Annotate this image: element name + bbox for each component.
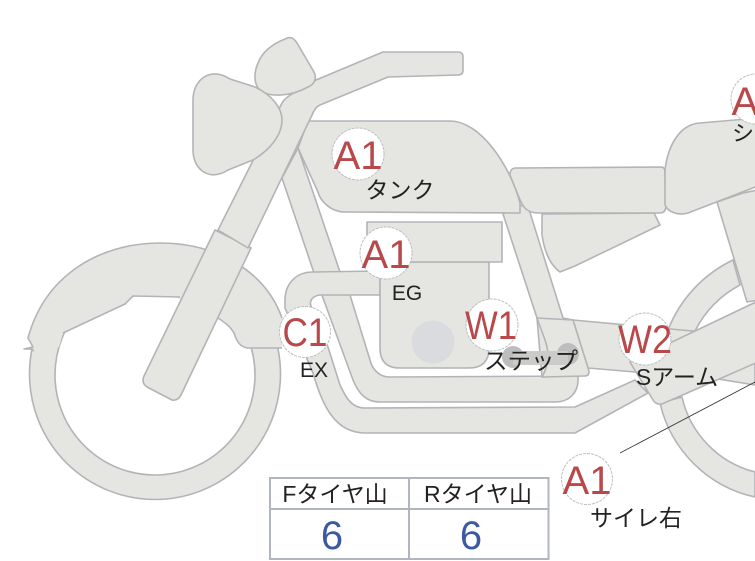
marker: step W1: W1 <box>465 304 517 348</box>
table header: rear: Rタイヤ山 <box>424 481 532 507</box>
marker: tank A1: A1 <box>334 134 382 178</box>
front fender <box>24 243 282 351</box>
leader line <box>620 382 755 453</box>
fork stem and handlebar <box>218 52 463 248</box>
marker: seat right edge <box>731 74 755 146</box>
muffler <box>630 301 755 404</box>
marker: seat right edge: シ <box>732 121 754 146</box>
marker: engine A1: EG <box>392 282 422 305</box>
table value: rear: 6 <box>460 514 482 558</box>
marker: swing arm W2 <box>618 313 718 390</box>
marker: right side cover A1 <box>562 454 682 531</box>
marker: right side cover A1: サイレ右 <box>590 505 682 531</box>
footstep marks <box>502 343 579 368</box>
swing arm <box>573 320 755 385</box>
marker: exhaust C1: EX <box>300 359 328 382</box>
fuel tank <box>298 121 520 213</box>
engine cylinder <box>367 222 502 262</box>
tire tread table <box>270 478 548 559</box>
side panel <box>542 213 660 272</box>
motorcycle illustration <box>24 38 755 500</box>
rear wheel and rear fender <box>660 260 755 497</box>
rear shock <box>717 190 755 302</box>
marker: exhaust C1: C1 <box>282 311 328 355</box>
engine crank cover <box>412 320 454 364</box>
front tire <box>30 248 280 500</box>
table value: front: 6 <box>321 514 343 558</box>
marker: step W1 <box>465 299 578 374</box>
headlight <box>193 74 282 175</box>
fork lower leg <box>143 230 251 400</box>
gauge <box>255 38 315 95</box>
seat <box>510 167 666 213</box>
marker: tank A1 <box>332 128 434 203</box>
marker: swing arm W2: W2 <box>618 318 672 362</box>
table grid <box>270 478 548 559</box>
marker: tank A1: タンク <box>366 177 434 203</box>
marker: exhaust C1 <box>280 306 330 382</box>
marker: engine A1 <box>360 227 422 305</box>
table header: front: Fタイヤ山 <box>282 481 388 507</box>
engine lower block <box>380 262 489 368</box>
rear frame tube <box>503 203 588 377</box>
tail cowl <box>665 118 755 214</box>
frame tube and lower loop <box>282 148 578 402</box>
exhaust pipe <box>285 271 648 433</box>
marker: engine A1: A1 <box>362 233 410 277</box>
marker: step W1: ステップ <box>484 348 578 374</box>
marker: right side cover A1: A1 <box>563 459 611 503</box>
footstep plate <box>537 318 589 377</box>
marker: swing arm W2: Sアーム <box>636 364 718 390</box>
